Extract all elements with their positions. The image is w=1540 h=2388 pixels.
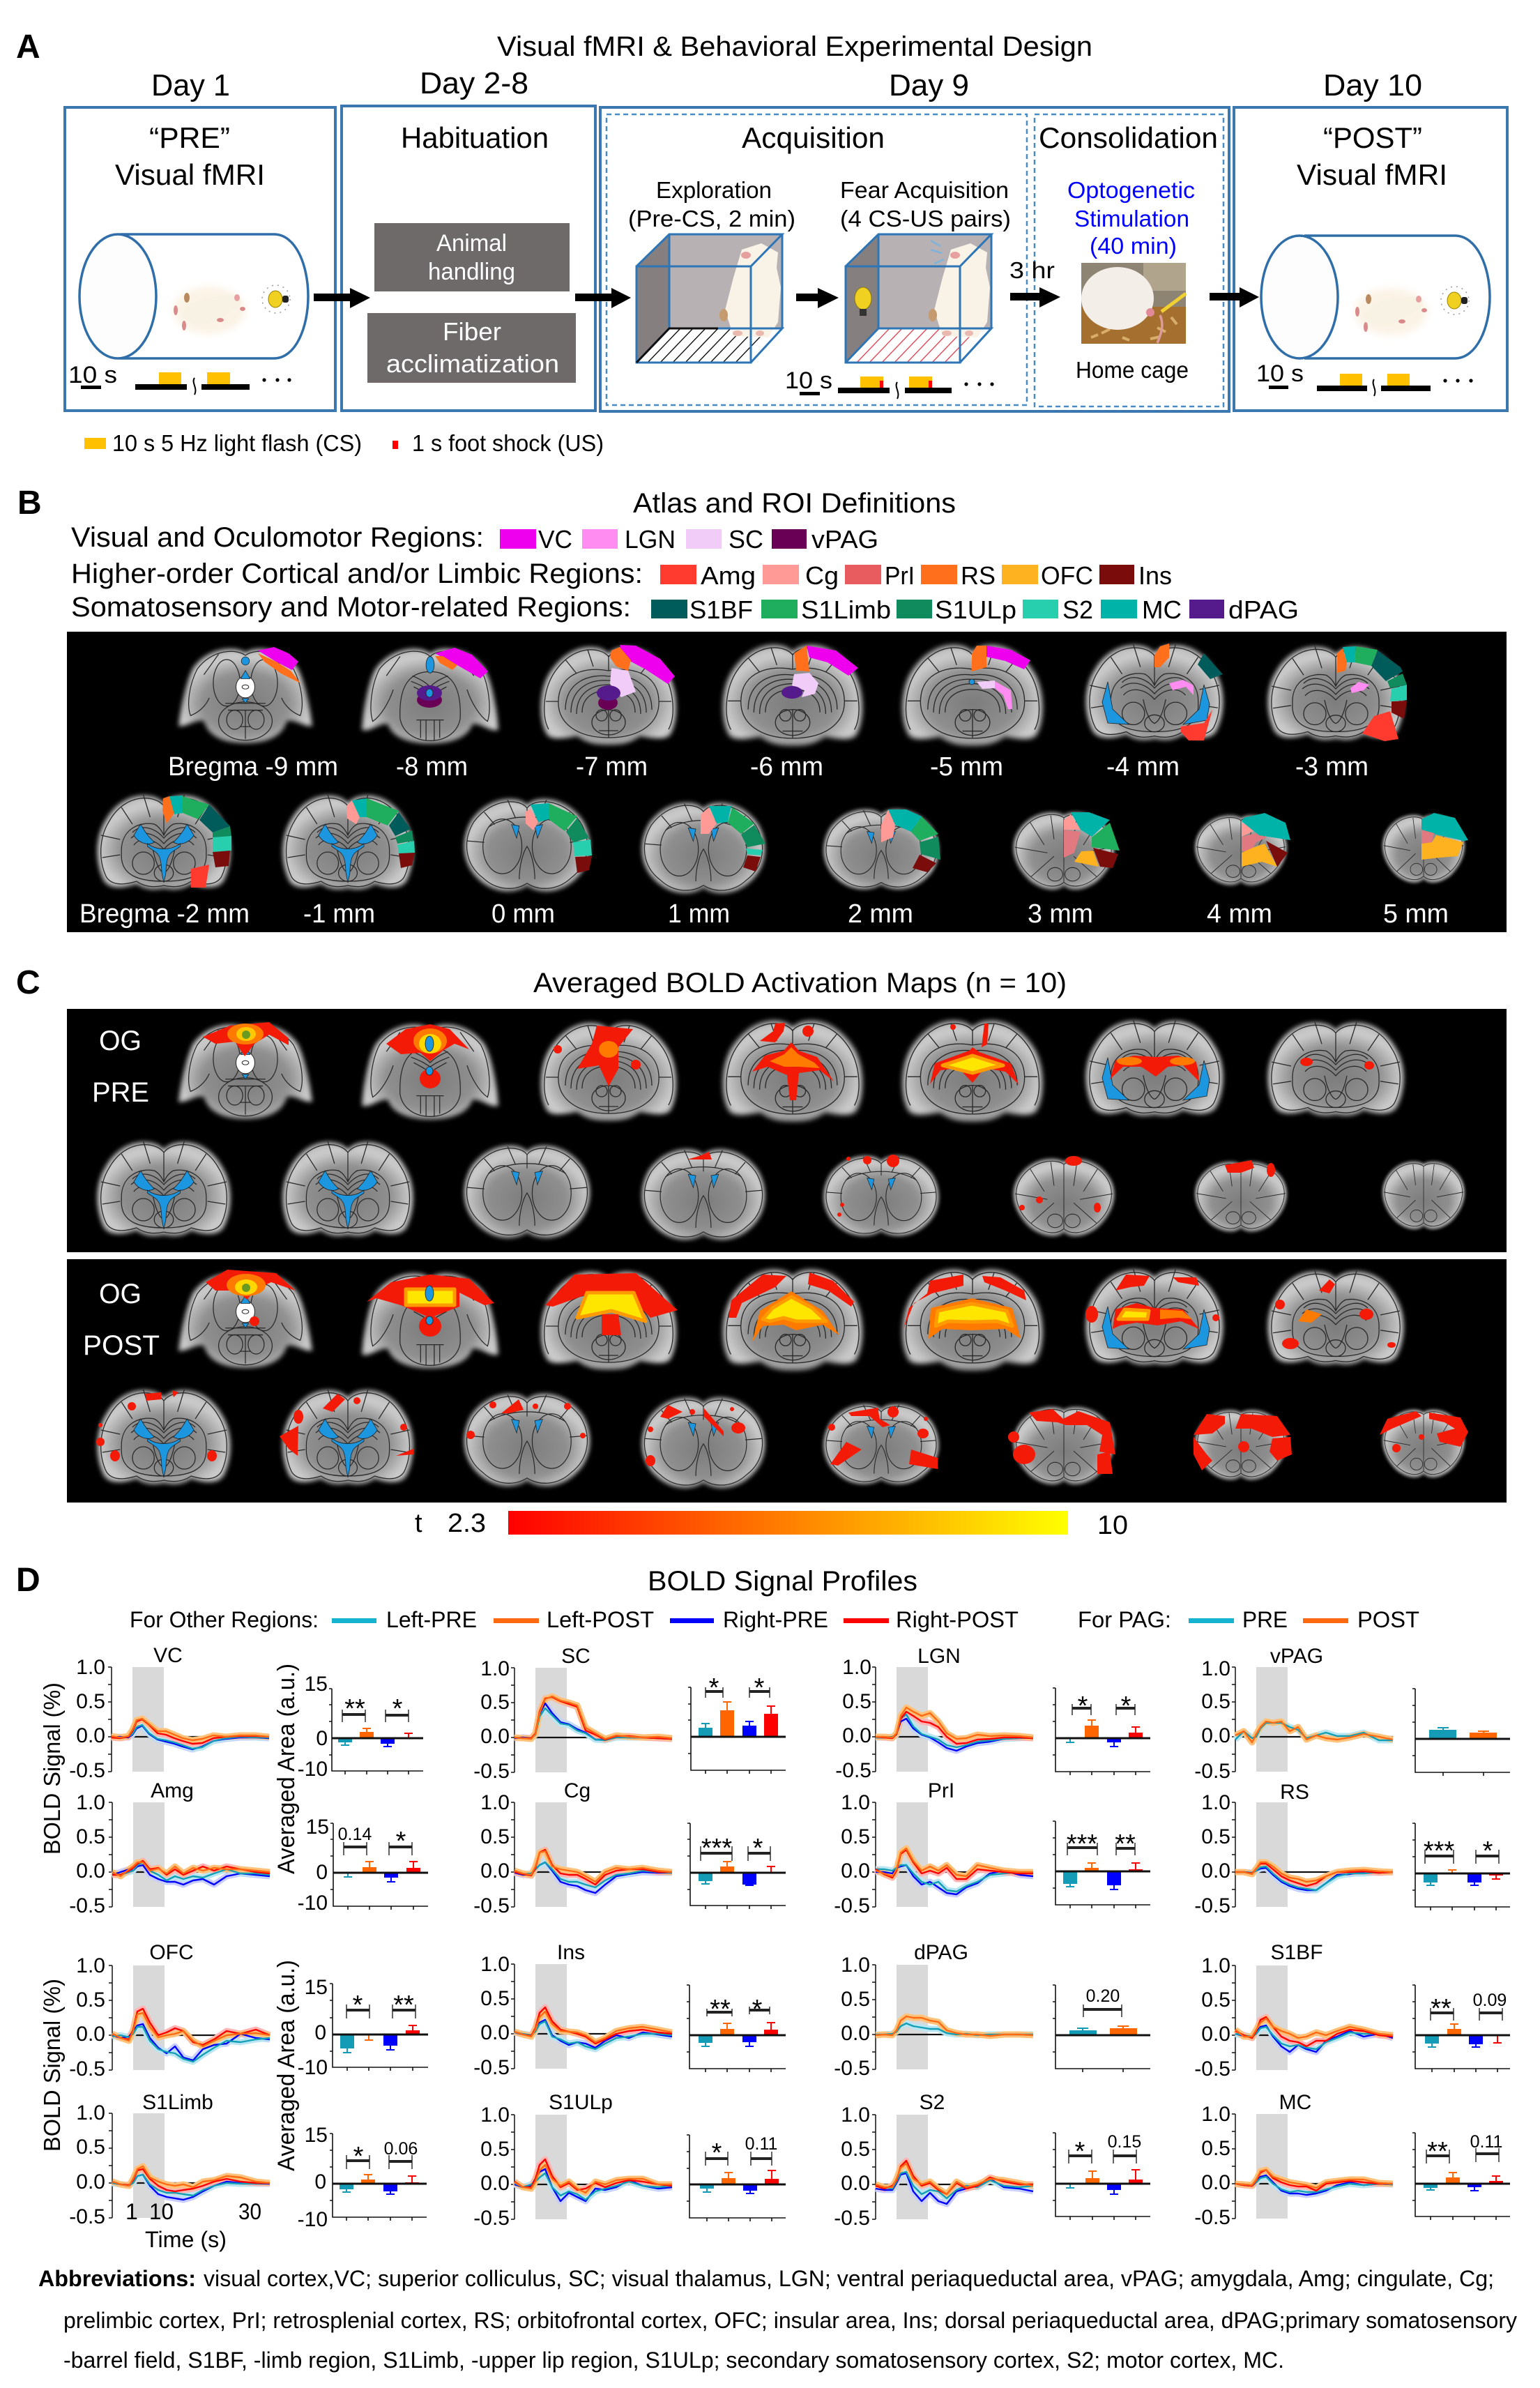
legend row: higher-order cortical and limbic: Cg: [805, 561, 839, 590]
bregma labels second row: 5 mm: [1383, 899, 1449, 929]
line chart: Amg: Amg: [151, 1779, 194, 1802]
abbreviations text: Abbreviations:: [38, 2266, 196, 2291]
line chart: PrI: 0.5: [841, 1825, 870, 1848]
line chart: S1ULp: 0.0: [480, 2172, 510, 2195]
stimulus timeline: [68, 362, 291, 395]
line chart: Ins: Ins: [557, 1941, 585, 1964]
legend row: somatosensory and motor: Somatosensory and Motor-related Regions:: [71, 592, 631, 623]
line chart: OFC: -0.5: [69, 2058, 105, 2081]
line chart: S1ULp: [473, 2091, 672, 2230]
colorbar t statistic: [415, 1509, 1128, 1540]
line chart: SC: 0.5: [480, 1691, 510, 1714]
map panel: OG PRE: OG: [99, 1026, 142, 1056]
bar chart: OFC: **: [393, 1991, 414, 2020]
box: PRE visual fMRI: [65, 107, 335, 411]
line chart: MC: 0.0: [1201, 2171, 1230, 2194]
bar chart: S1Limb: 15: [305, 2124, 328, 2147]
bar chart: Cg: ***: [701, 1834, 732, 1863]
line chart: S1Limb: 1.0: [76, 2101, 105, 2124]
bar chart: S1Limb: *: [353, 2142, 364, 2171]
line chart: SC: -0.5: [473, 1760, 510, 1783]
day headings: Day 10: [1323, 68, 1422, 102]
line chart: PrI: 1.0: [841, 1791, 870, 1814]
bregma labels first row: Bregma -9 mm: [168, 752, 338, 782]
legend D: POST: [1357, 1607, 1419, 1632]
bregma labels second row: -1 mm: [303, 899, 375, 929]
icon: exploration cube: [636, 234, 782, 363]
box: day 9 acquisition and consolidation: (4 CS-US pairs): [840, 206, 1011, 231]
legend row: higher-order cortical and limbic: Higher-order Cortical and/or Limbic Regions:: [71, 558, 643, 589]
line chart: LGN: -0.5: [835, 1759, 871, 1782]
bar chart: Amg: 0.14: [338, 1825, 372, 1844]
optogenetic stimulation label: Stimulation: [1074, 206, 1189, 231]
bar chart: VC: -10: [298, 1758, 328, 1781]
bar chart: S1BF: 0.09: [1473, 1991, 1507, 2010]
line chart: dPAG: 1.0: [841, 1954, 870, 1977]
line chart: vPAG: vPAG: [1270, 1645, 1323, 1668]
legend row: visual and oculomotor: vPAG: [811, 525, 878, 554]
box: fiber acclimatization: acclimatization: [386, 349, 559, 378]
bar chart: RS: ***: [1424, 1836, 1454, 1866]
legend row: visual and oculomotor: SC: [729, 525, 763, 554]
legend row: somatosensory and motor: S1BF: [689, 595, 753, 624]
box: habituation: Habituation: [401, 121, 549, 154]
bar chart: LGN: *: [1121, 1691, 1131, 1721]
day headings: Day 9: [889, 68, 969, 102]
bar chart: VC: **: [344, 1694, 365, 1724]
colorbar t statistic: 10: [1097, 1511, 1128, 1540]
line chart: S1ULp: -0.5: [473, 2207, 510, 2230]
axis title: BOLD signal upper: BOLD Signal (%): [39, 1682, 65, 1855]
legend: stimuli: 1 s foot shock (US): [412, 430, 604, 456]
bar chart: Cg: [687, 1823, 786, 1909]
day headings: [151, 66, 1422, 102]
line chart: LGN: 1.0: [842, 1656, 871, 1679]
line chart: Cg: Cg: [564, 1779, 590, 1802]
bar chart: VC: 15: [305, 1673, 328, 1696]
bar chart: Amg: -10: [298, 1892, 328, 1915]
optogenetic stimulation label: [1067, 177, 1195, 259]
line chart: Ins: 1.0: [480, 1953, 510, 1976]
line chart: dPAG: -0.5: [834, 2057, 870, 2080]
activation blobs POST: [96, 1270, 1468, 1474]
bar chart: PrI: [1053, 1821, 1150, 1908]
line chart: S2: S2: [920, 2091, 945, 2114]
panel D: BOLD signal profiles: [16, 1562, 1510, 2252]
optogenetic stimulation label: (40 min): [1090, 233, 1177, 259]
line chart: LGN: 0.0: [842, 1724, 871, 1747]
title A: Visual fMRI & Behavioral Experimental Design: [497, 31, 1092, 62]
line chart: Cg: 1.0: [480, 1791, 510, 1814]
line chart: OFC: 0.5: [76, 1988, 105, 2011]
line chart: S1Limb: 0.5: [76, 2136, 105, 2159]
line chart: RS: 0.0: [1201, 1860, 1230, 1883]
bar chart: S1ULp: 0.11: [745, 2134, 777, 2154]
bar chart: OFC: -10: [298, 2056, 328, 2079]
line chart: Cg: 0.5: [480, 1825, 510, 1848]
box: PRE visual fMRI: “PRE”: [149, 121, 230, 154]
stimulus timeline: [1256, 360, 1473, 396]
bregma labels second row: 2 mm: [848, 899, 913, 929]
line chart: RS: [1194, 1781, 1393, 1917]
line chart: RS: -0.5: [1194, 1894, 1230, 1917]
legend D: Right-PRE: [723, 1607, 828, 1632]
legend row: somatosensory and motor: S2: [1062, 595, 1093, 624]
line chart: Cg: 0.0: [480, 1860, 510, 1883]
legend row: higher-order cortical and limbic: [71, 558, 1172, 590]
time axis labels: 10: [149, 2199, 174, 2224]
bar chart: S1ULp: [687, 2134, 786, 2221]
ROI overlays first row: [258, 644, 1407, 741]
bregma labels first row: -6 mm: [750, 752, 823, 782]
day headings: Day 1: [151, 68, 230, 102]
bar chart: S1Limb: 0.06: [384, 2139, 418, 2159]
stimulus timeline: 10 s: [68, 362, 117, 388]
line chart: Amg: 0.5: [76, 1825, 105, 1848]
bar chart: Amg: [298, 1816, 428, 1915]
legend row: visual and oculomotor: LGN: [625, 525, 676, 554]
bregma labels second row: 0 mm: [491, 899, 555, 929]
panel letter A: A: [16, 29, 40, 66]
map panel: OG POST: OG: [99, 1279, 142, 1309]
bar chart: Amg: 0: [316, 1861, 328, 1884]
time axis labels: Time (s): [145, 2227, 227, 2252]
legend row: visual and oculomotor: [71, 522, 878, 554]
bar chart: PrI: ***: [1067, 1830, 1097, 1859]
box: habituation: [342, 106, 595, 411]
line chart: vPAG: 1.0: [1201, 1657, 1230, 1680]
optogenetic stimulation label: Optogenetic: [1067, 177, 1195, 203]
panel letter C: C: [16, 964, 40, 1001]
bregma labels second row: 4 mm: [1207, 899, 1272, 929]
arrow: acquisition to consolidation: [1010, 287, 1060, 307]
axis title: averaged area lower: Averaged Area (a.u.): [273, 1960, 300, 2171]
line chart: S1BF: [1194, 1941, 1393, 2081]
bar chart: dPAG: 0.20: [1086, 1986, 1120, 2006]
icon: scanner tube with rat and bulb: [1261, 236, 1490, 358]
abbreviations text: visual cortex,VC; superior colliculus, SC; visual thalamus, LGN; ventral periaqueductal area, vPAG; amygdala, Amg; cingulate, Cg;: [204, 2266, 1494, 2291]
bar chart: S2: *: [1075, 2137, 1085, 2166]
bar chart: S2: [1053, 2132, 1150, 2220]
box: animal handling: [374, 223, 570, 291]
bregma labels first row: [168, 752, 1369, 782]
line chart: vPAG: 0.5: [1201, 1690, 1230, 1713]
line chart: S1BF: 0.0: [1201, 2023, 1230, 2046]
line chart: VC: VC: [153, 1644, 183, 1667]
line chart: VC: [69, 1644, 269, 1782]
bar chart: S1Limb: -10: [298, 2208, 328, 2231]
line chart: S1ULp: 1.0: [480, 2104, 510, 2127]
line chart: MC: MC: [1279, 2091, 1311, 2114]
map panel: OG POST: POST: [83, 1330, 160, 1361]
line chart: SC: [473, 1645, 672, 1783]
bar chart: VC: 0: [316, 1727, 328, 1750]
line chart: MC: 0.5: [1201, 2137, 1230, 2160]
legend: stimuli: [84, 430, 604, 456]
legend D: Left-PRE: [386, 1607, 477, 1632]
bar chart: S2: 0.15: [1108, 2132, 1141, 2152]
line chart: S1ULp: S1ULp: [549, 2091, 613, 2114]
panel A: experimental design: [16, 29, 1507, 456]
bar chart: Amg: 15: [306, 1816, 329, 1839]
bregma labels first row: -8 mm: [396, 752, 468, 782]
legend D: For PAG:: [1078, 1607, 1171, 1632]
panel C: averaged BOLD activation maps: [16, 964, 1507, 1540]
line chart: VC: 0.5: [76, 1690, 105, 1713]
line chart: vPAG: -0.5: [1194, 1760, 1230, 1783]
time axis labels: 1: [125, 2199, 138, 2224]
bar chart: vPAG: [1412, 1689, 1510, 1776]
bar chart: RS: [1412, 1823, 1510, 1910]
bar chart: Cg: *: [753, 1834, 763, 1863]
legend row: higher-order cortical and limbic: OFC: [1041, 561, 1093, 590]
arrow: consolidation to post: [1210, 287, 1259, 307]
bar chart: VC: *: [392, 1694, 403, 1724]
map panel: OG PRE: [67, 1009, 1507, 1252]
icon: fear acquisition cube: [846, 234, 991, 363]
bar chart: SC: [688, 1673, 786, 1774]
bar chart: S1ULp: *: [712, 2138, 722, 2168]
bar chart: SC: *: [754, 1673, 765, 1703]
abbreviations text: [38, 2266, 1517, 2373]
line chart: S1BF: S1BF: [1270, 1941, 1323, 1964]
bregma labels first row: -3 mm: [1295, 752, 1369, 782]
line chart: S1Limb: 0.0: [76, 2170, 105, 2193]
bar chart: OFC: *: [353, 1991, 363, 2020]
line chart: S2: -0.5: [834, 2207, 870, 2230]
line chart: PrI: -0.5: [834, 1894, 870, 1917]
ROI overlays second row: [162, 796, 1468, 888]
line chart: S1BF: 1.0: [1201, 1954, 1230, 1977]
box: day 9 acquisition and consolidation: Fear Acquisition: [840, 177, 1009, 203]
line chart: RS: 0.5: [1201, 1825, 1230, 1848]
line chart: Amg: [69, 1779, 270, 1917]
line chart: VC: -0.5: [69, 1759, 105, 1782]
bar chart: S1Limb: 0: [314, 2170, 326, 2193]
line chart: LGN: [835, 1645, 1033, 1782]
line chart: OFC: [69, 1941, 270, 2081]
timeline day 9: 10 s: [785, 367, 832, 394]
line chart: VC: 1.0: [76, 1656, 105, 1679]
label home cage: Home cage: [1076, 357, 1189, 383]
bar chart: OFC: 15: [305, 1976, 328, 1999]
box: fiber acclimatization: [367, 313, 576, 383]
line chart: dPAG: [834, 1941, 1033, 2080]
legend D: PRE: [1242, 1607, 1288, 1632]
line chart: Ins: [473, 1941, 672, 2079]
line chart: Ins: -0.5: [473, 2056, 510, 2079]
line chart: S1BF: -0.5: [1194, 2058, 1230, 2081]
abbreviations text: -barrel field, S1BF, -limb region, S1Limb, -upper lip region, S1ULp; secondary somatosensory cortex, S2; motor cortex, MC.: [63, 2348, 1284, 2373]
line chart: SC: 0.0: [480, 1725, 510, 1748]
map panel: OG PRE: PRE: [92, 1077, 149, 1108]
line chart: S2: [834, 2091, 1033, 2230]
arrow: exploration to fear acquisition: [796, 288, 839, 308]
line chart: vPAG: 0.0: [1201, 1724, 1230, 1747]
line chart: S1ULp: 0.5: [480, 2138, 510, 2161]
legend row: higher-order cortical and limbic: Ins: [1138, 561, 1172, 590]
line chart: Amg: 1.0: [76, 1791, 105, 1814]
abbreviations text: prelimbic cortex, PrI; retrosplenial cortex, RS; orbitofrontal cortex, OFC; insular area, Ins; dorsal periaqueductal area, dPAG;primary somatosensory: [63, 2308, 1517, 2333]
line chart: S1Limb: -0.5: [69, 2205, 105, 2228]
bar chart: dPAG: [1053, 1985, 1150, 2072]
box: POST visual fMRI: [1234, 107, 1507, 411]
arrow: day 1 to habituation: [314, 288, 370, 308]
box: fiber acclimatization: Fiber: [443, 317, 501, 346]
arrow: habituation to acquisition: [575, 288, 631, 308]
bar chart: LGN: *: [1078, 1691, 1088, 1721]
box: day 9 acquisition and consolidation: Consolidation: [1039, 121, 1218, 154]
bar chart: OFC: 0: [314, 2021, 326, 2044]
bar chart: S1BF: **: [1431, 1994, 1451, 2023]
bar chart: Ins: **: [710, 1995, 731, 2024]
title C: Averaged BOLD Activation Maps (n = 10): [533, 968, 1067, 998]
timeline day 9: [785, 367, 994, 399]
panel letter B: B: [17, 485, 42, 522]
time axis labels: [125, 2199, 261, 2252]
line chart: LGN: LGN: [917, 1645, 961, 1668]
line chart: S1BF: 0.5: [1201, 1988, 1230, 2011]
bregma labels second row: 1 mm: [668, 899, 730, 929]
bar chart: LGN: [1053, 1688, 1150, 1775]
activation blobs PRE: [203, 1022, 1374, 1217]
line chart: S1Limb: [69, 2091, 270, 2252]
colorbar t statistic: t: [415, 1509, 422, 1538]
line chart: OFC: 0.0: [76, 2023, 105, 2046]
bar chart: S1Limb: [298, 2124, 427, 2231]
line chart: LGN: 0.5: [842, 1690, 871, 1713]
bar chart: MC: [1412, 2132, 1510, 2220]
title D: BOLD Signal Profiles: [648, 1566, 917, 1597]
legend row: somatosensory and motor: S1Limb: [801, 595, 891, 624]
bar chart: RS: *: [1483, 1836, 1493, 1866]
bar chart: S1BF: [1412, 1985, 1510, 2072]
legend D: Left-POST: [547, 1607, 654, 1632]
axis title: BOLD signal lower: BOLD Signal (%): [39, 1979, 65, 2152]
bregma labels second row: Bregma -2 mm: [79, 899, 250, 929]
day headings: Day 2-8: [420, 66, 528, 100]
title B: Atlas and ROI Definitions: [633, 488, 956, 519]
box: POST visual fMRI: “POST”: [1323, 121, 1422, 154]
box: animal handling: handling: [428, 259, 515, 285]
label 3 hr: 3 hr: [1009, 257, 1055, 283]
axis title: averaged area upper: Averaged Area (a.u.): [273, 1664, 300, 1874]
box: PRE visual fMRI: Visual fMRI: [115, 158, 265, 191]
atlas panel: coronal sections: [67, 632, 1507, 932]
line chart: dPAG: 0.0: [841, 2022, 870, 2045]
line chart: PrI: 0.0: [841, 1860, 870, 1883]
box: animal handling: Animal: [436, 230, 507, 257]
legend D: [130, 1607, 1419, 1632]
line chart: Amg: -0.5: [69, 1894, 105, 1917]
legend row: somatosensory and motor: dPAG: [1228, 595, 1299, 624]
line chart: SC: SC: [561, 1645, 590, 1668]
line chart: VC: 0.0: [76, 1724, 105, 1747]
legend row: visual and oculomotor: Visual and Oculomotor Regions:: [71, 522, 484, 553]
line chart: OFC: OFC: [149, 1941, 194, 1964]
photo: rat in home cage: [1081, 263, 1186, 344]
line chart: SC: 1.0: [480, 1657, 510, 1680]
time axis labels: 30: [238, 2199, 261, 2224]
legend row: somatosensory and motor: S1ULp: [935, 595, 1016, 624]
legend row: higher-order cortical and limbic: RS: [961, 561, 996, 590]
bregma labels second row: [79, 899, 1449, 929]
legend row: higher-order cortical and limbic: Amg: [701, 561, 756, 590]
line chart: RS: RS: [1280, 1781, 1309, 1804]
line chart: Cg: -0.5: [473, 1894, 510, 1917]
icon: scanner tube with rat and bulb: [79, 234, 308, 358]
bregma labels second row: 3 mm: [1028, 899, 1093, 929]
bar chart: OFC: [298, 1976, 428, 2079]
line chart: PrI: PrI: [928, 1779, 954, 1802]
bar chart: Ins: [687, 1985, 786, 2072]
line chart: MC: -0.5: [1194, 2206, 1230, 2229]
panel letter D: D: [16, 1562, 40, 1599]
box: day 9 acquisition and consolidation: [600, 107, 1229, 411]
line chart: Ins: 0.5: [480, 1987, 510, 2010]
bregma labels first row: -4 mm: [1106, 752, 1180, 782]
legend D: For Other Regions:: [130, 1607, 319, 1632]
bar chart: PrI: **: [1115, 1830, 1136, 1859]
line chart: Amg: 0.0: [76, 1860, 105, 1883]
bregma labels first row: -5 mm: [930, 752, 1003, 782]
line chart: S2: 0.0: [841, 2172, 870, 2195]
line chart: MC: 1.0: [1201, 2103, 1230, 2126]
line chart: Cg: [473, 1779, 672, 1917]
line chart: PrI: [834, 1779, 1033, 1917]
panel B: atlas and ROI definitions: [17, 485, 1507, 932]
box: day 9 acquisition and consolidation: (Pre-CS, 2 min): [628, 206, 795, 231]
bar chart: MC: 0.11: [1470, 2132, 1502, 2152]
legend row: somatosensory and motor: MC: [1142, 595, 1182, 624]
line chart: S2: 1.0: [841, 2104, 870, 2127]
legend row: somatosensory and motor: [71, 592, 1299, 624]
legend row: higher-order cortical and limbic: PrI: [885, 561, 915, 590]
line chart: Ins: 0.0: [480, 2021, 510, 2044]
bar chart: SC: *: [709, 1673, 719, 1703]
colorbar t statistic: 2.3: [448, 1509, 486, 1538]
line chart: dPAG: 0.5: [841, 1988, 870, 2011]
legend D: Right-POST: [896, 1607, 1019, 1632]
bar chart: VC: [298, 1673, 423, 1781]
line chart: MC: [1194, 2091, 1393, 2229]
bar chart: MC: **: [1427, 2137, 1448, 2166]
box: day 9 acquisition and consolidation: Acquisition: [742, 121, 885, 154]
legend: stimuli: 10 s 5 Hz light flash (CS): [112, 430, 362, 456]
box: day 9 acquisition and consolidation: Exploration: [656, 177, 772, 203]
box: POST visual fMRI: Visual fMRI: [1297, 158, 1447, 191]
line chart: vPAG: [1194, 1645, 1393, 1783]
bar chart: Ins: *: [752, 1995, 763, 2024]
line chart: S1Limb: S1Limb: [142, 2091, 213, 2114]
legend row: visual and oculomotor: VC: [538, 525, 572, 554]
bar chart: Amg: *: [396, 1827, 406, 1856]
map panel: OG POST: [67, 1259, 1507, 1503]
line chart: S2: 0.5: [841, 2138, 870, 2161]
bregma labels first row: -7 mm: [576, 752, 648, 782]
line chart: dPAG: dPAG: [914, 1941, 968, 1964]
line chart: RS: 1.0: [1201, 1791, 1230, 1814]
stimulus timeline: 10 s: [1256, 360, 1304, 387]
line chart: OFC: 1.0: [76, 1954, 105, 1977]
